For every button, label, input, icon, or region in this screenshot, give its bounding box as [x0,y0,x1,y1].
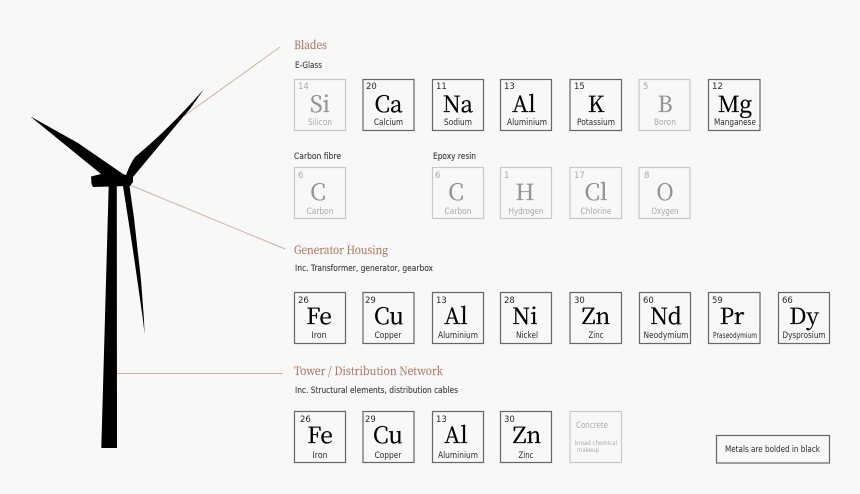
element: hydrogen: H [515,175,535,207]
element: iron: Fe [306,299,332,331]
element: concrete: broad chemical [575,439,617,447]
element: carbon (epoxy): 6 [435,171,440,181]
element: aluminium: 13 [436,415,447,425]
element: carbon (epoxy): C [448,175,464,207]
element: zinc: 30 [504,415,515,425]
element: aluminium: 13 [504,82,515,92]
element: iron [294,412,346,462]
element: boron [639,80,690,130]
leader line: blades [184,47,280,116]
element: iron: 26 [300,415,311,425]
element: silicon: Silicon [308,118,332,128]
element: zinc: Zinc [588,331,604,341]
element: boron: Boron [654,118,676,128]
element: hydrogen [500,168,552,218]
element: manganese: 12 [712,82,723,92]
element: zinc [570,292,622,344]
element: oxygen [639,168,690,218]
element: oxygen: 8 [644,171,649,181]
element: copper [363,412,414,462]
leader line: tower [117,372,283,374]
element: praseodymium: Pr [720,299,745,331]
element: hydrogen: 1 [504,171,509,181]
element: praseodymium [708,292,760,344]
element: manganese: Mg [718,87,752,119]
element: aluminium: Aluminium [507,118,547,128]
element: silicon: 14 [298,82,309,92]
element: sodium: Sodium [444,118,472,128]
element: zinc: Zn [582,299,610,331]
heading: blades: Blades [294,37,327,53]
element: chlorine [570,168,622,218]
element: aluminium: Al [512,87,536,119]
element: iron: 26 [298,296,309,306]
element: nickel: 28 [504,296,515,306]
element: nickel [500,292,552,344]
element: silicon [294,80,346,130]
element: hydrogen: Hydrogen [508,207,544,217]
element: zinc: Zn [513,418,541,450]
element: neodymium [640,292,690,344]
heading: tower / distribution network: Tower / Distribution Network [294,363,443,379]
element: praseodymium: Praseodymium [713,331,757,340]
element: iron: Iron [312,451,328,461]
element: aluminium: Aluminium [438,451,478,461]
element: nickel: Ni [512,299,538,331]
heading: generator housing: Generator Housing [294,242,388,258]
element: copper: 29 [365,415,376,425]
element: neodymium: Neodymium [644,331,688,341]
icon: wind turbine silhouette [31,89,204,448]
element: potassium: Potassium [577,118,615,128]
element: carbon (fibre): 6 [298,171,303,181]
element: aluminium [432,292,484,344]
element: calcium: Calcium [374,118,403,128]
leader line: generator housing [130,185,285,249]
element: sodium [432,80,484,130]
element: aluminium: Al [444,418,468,450]
element: nickel: Nickel [516,331,538,341]
subheading: tower contents: Inc. Structural elements, distribution cables [295,386,459,396]
element: zinc: Zinc [518,451,534,461]
element: calcium: Ca [374,87,403,119]
element: praseodymium: 59 [712,296,723,306]
subheading: epoxy resin: Epoxy resin [433,152,476,162]
element: boron: 5 [643,82,648,92]
legend note: Metals are bolded in black [725,445,820,455]
element: aluminium: 13 [436,296,447,306]
element: potassium: 15 [574,82,585,92]
element: manganese: Manganese [714,118,756,128]
element: copper: Copper [374,451,402,461]
element: carbon (fibre): Carbon [306,207,334,217]
element: chlorine: Cl [584,175,608,207]
element: oxygen: O [656,175,674,207]
element: aluminium [500,80,552,130]
element: carbon (epoxy) [432,168,484,218]
element: concrete: Concrete [576,421,608,431]
element: sodium: Na [443,87,474,119]
element: chlorine: Chlorine [580,207,612,217]
element: aluminium: Al [444,299,468,331]
element: copper [363,292,414,344]
element: aluminium: Aluminium [438,331,478,341]
element: iron: Iron [312,331,326,341]
subheading: carbon fibre: Carbon fibre [294,152,341,162]
element: oxygen: Oxygen [652,207,678,217]
element: neodymium: Nd [650,299,682,331]
element: boron: B [657,87,673,119]
element: carbon (fibre): C [310,175,326,207]
element: calcium: 20 [366,82,377,92]
element: concrete [570,412,622,462]
element: aluminium [432,412,484,462]
element: concrete: makeup [577,446,599,454]
element: carbon (fibre) [294,168,346,218]
element: calcium [363,80,414,130]
subheading: E-Glass: E-Glass [295,61,322,71]
element: copper: 29 [365,296,376,306]
element: zinc: 30 [574,296,585,306]
element: dysprosium [778,292,830,344]
element: dysprosium: Dy [789,299,819,331]
element: neodymium: 60 [643,296,654,306]
legend note [716,436,830,463]
element: manganese [708,80,760,130]
element: carbon (epoxy): Carbon [444,207,472,217]
element: dysprosium: 66 [782,296,793,306]
element: zinc [500,412,552,462]
element: dysprosium: Dysprosium [782,331,826,341]
element: sodium: 11 [436,82,447,92]
element: potassium [570,80,622,130]
element: chlorine: 17 [574,171,585,181]
element: iron: Fe [307,418,333,450]
element: copper: Cu [373,418,403,450]
element: copper: Cu [374,299,404,331]
element: silicon: Si [310,87,330,119]
subheading: generator contents: Inc. Transformer, generator, gearbox [295,264,433,274]
element: potassium: K [588,87,605,119]
element: copper: Copper [374,331,402,341]
element: iron [294,292,346,344]
